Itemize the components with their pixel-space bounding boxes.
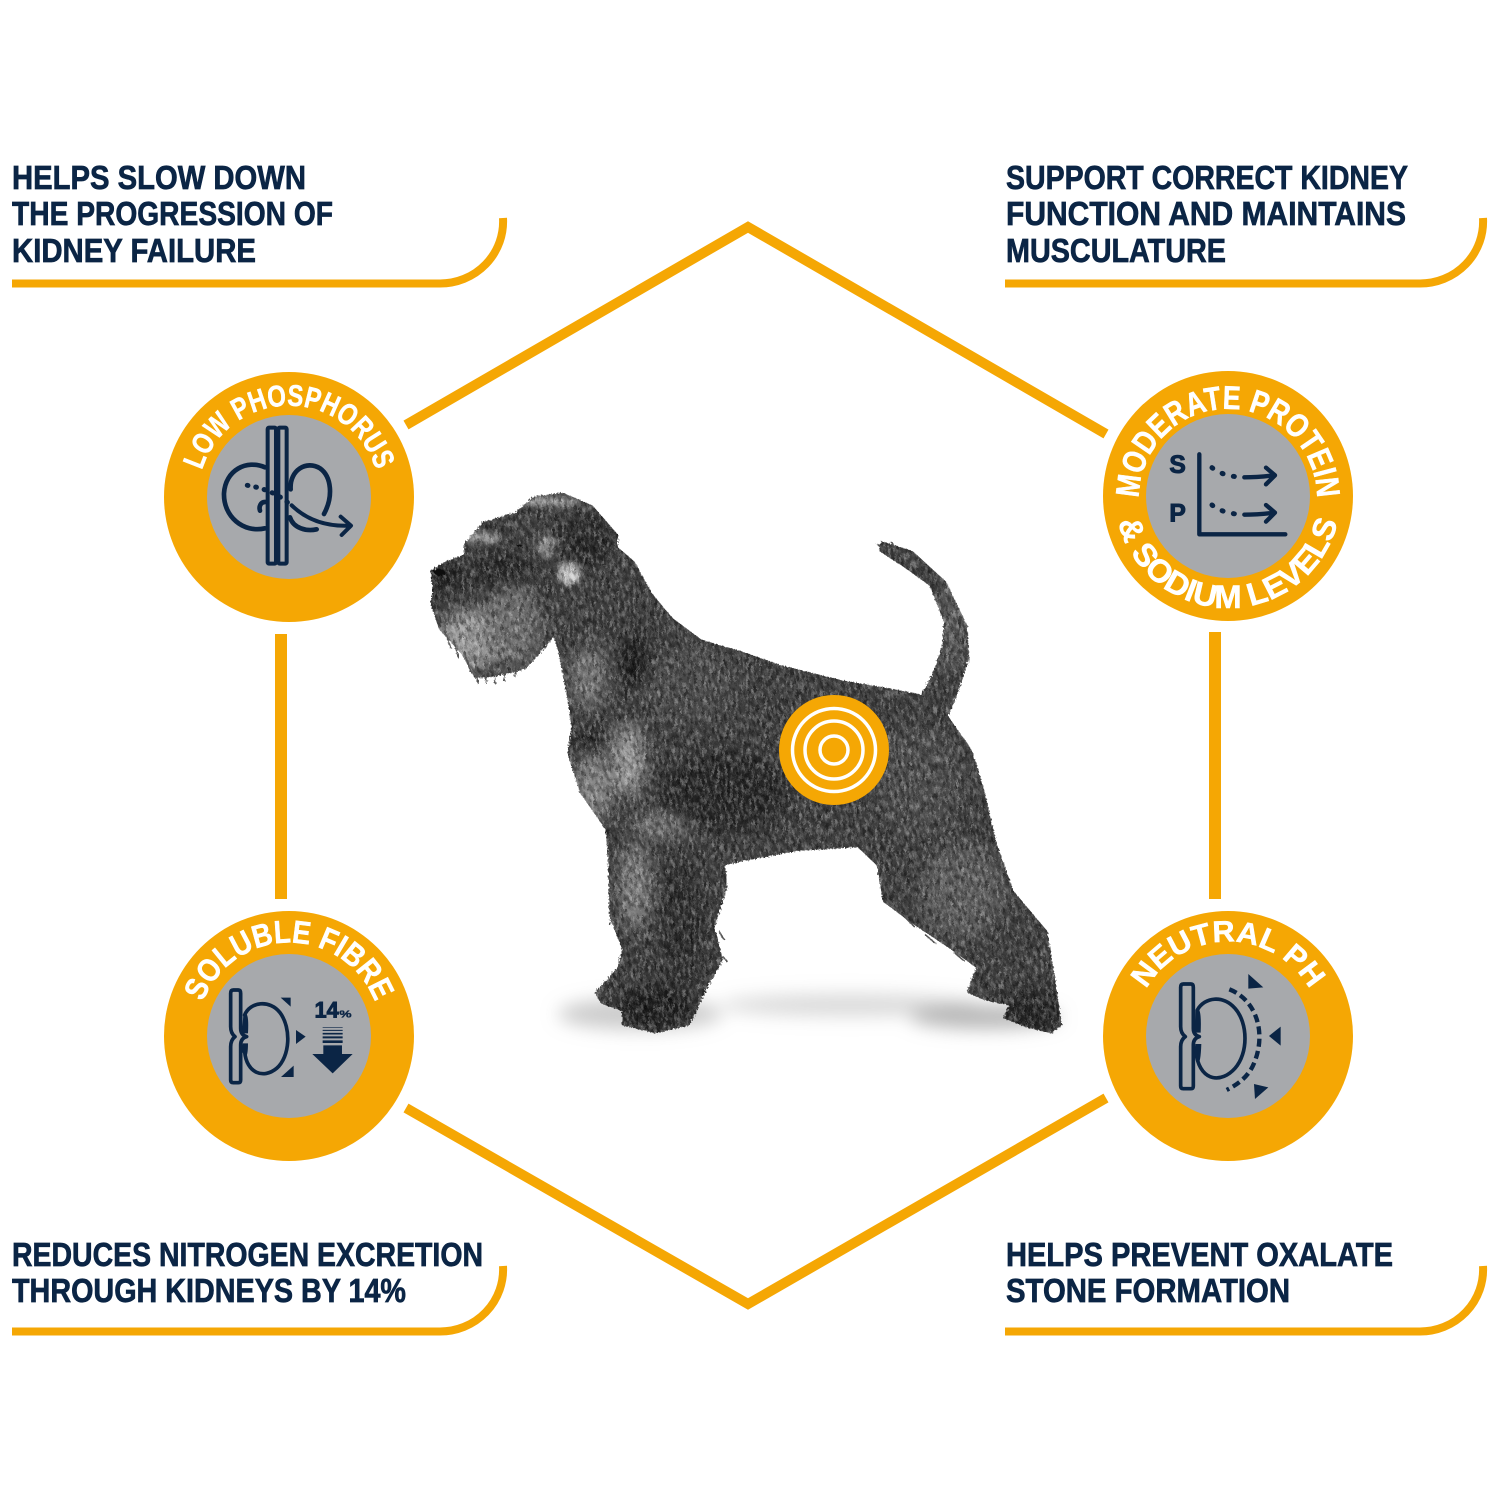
icon: kidney with 14 percent reduction: 14 [315, 997, 339, 1022]
icon: kidney with 14 percent reduction [231, 990, 353, 1083]
badge: moderate protein and sodium: & SODIUM LEVELS [1119, 518, 1336, 608]
icon: kidney with pH arc [1181, 974, 1281, 1099]
icon: kidney with 14 percent reduction: % [339, 1009, 352, 1020]
badge: soluble fibre [164, 911, 414, 1161]
icon: sodium and phosphorus graph: P [1169, 501, 1186, 528]
badge: low phosphorus: LOW PHOSPHORUS [182, 384, 394, 469]
icon: sodium and phosphorus graph: S [1169, 452, 1186, 479]
badge: neutral pH: NEUTRAL PH [1130, 920, 1326, 988]
callout: kidney function and musculature: FUNCTION AND MAINTAINS [1006, 195, 1406, 232]
badge: soluble fibre: SOLUBLE FIBRE [185, 920, 395, 1002]
callout: kidney function and musculature: MUSCULATURE [1006, 232, 1226, 269]
callout: slow kidney failure: THE PROGRESSION OF [12, 195, 333, 232]
callout: slow kidney failure [12, 159, 503, 284]
icon: kidneys with phosphorus arrow [224, 428, 351, 564]
callout: oxalate stone formation: HELPS PREVENT OXALATE [1006, 1236, 1393, 1273]
callout: slow kidney failure: HELPS SLOW DOWN [12, 159, 306, 196]
badge: moderate protein and sodium: MODERATE PROTEIN [1116, 386, 1340, 496]
icon: sodium and phosphorus graph [1169, 452, 1285, 534]
badge: moderate protein and sodium [1103, 371, 1353, 621]
dog photo: standing schnauzer [420, 480, 1080, 1050]
callout: kidney function and musculature: SUPPORT CORRECT KIDNEY [1006, 159, 1408, 196]
callout: nitrogen excretion: REDUCES NITROGEN EXCRETION [12, 1236, 483, 1273]
hexagon frame [281, 227, 1215, 1304]
callout: kidney function and musculature [1005, 159, 1483, 284]
callout: oxalate stone formation: STONE FORMATION [1006, 1272, 1290, 1309]
callout: oxalate stone formation [1005, 1236, 1483, 1332]
callout: nitrogen excretion: THROUGH KIDNEYS BY 14% [12, 1272, 406, 1309]
dog floor shadow [558, 994, 1060, 1030]
badge: low phosphorus [164, 372, 414, 622]
badge: neutral pH [1103, 911, 1353, 1161]
callout: nitrogen excretion [12, 1236, 503, 1332]
icon: target on kidney area [779, 695, 889, 805]
callout: slow kidney failure: KIDNEY FAILURE [12, 232, 256, 269]
